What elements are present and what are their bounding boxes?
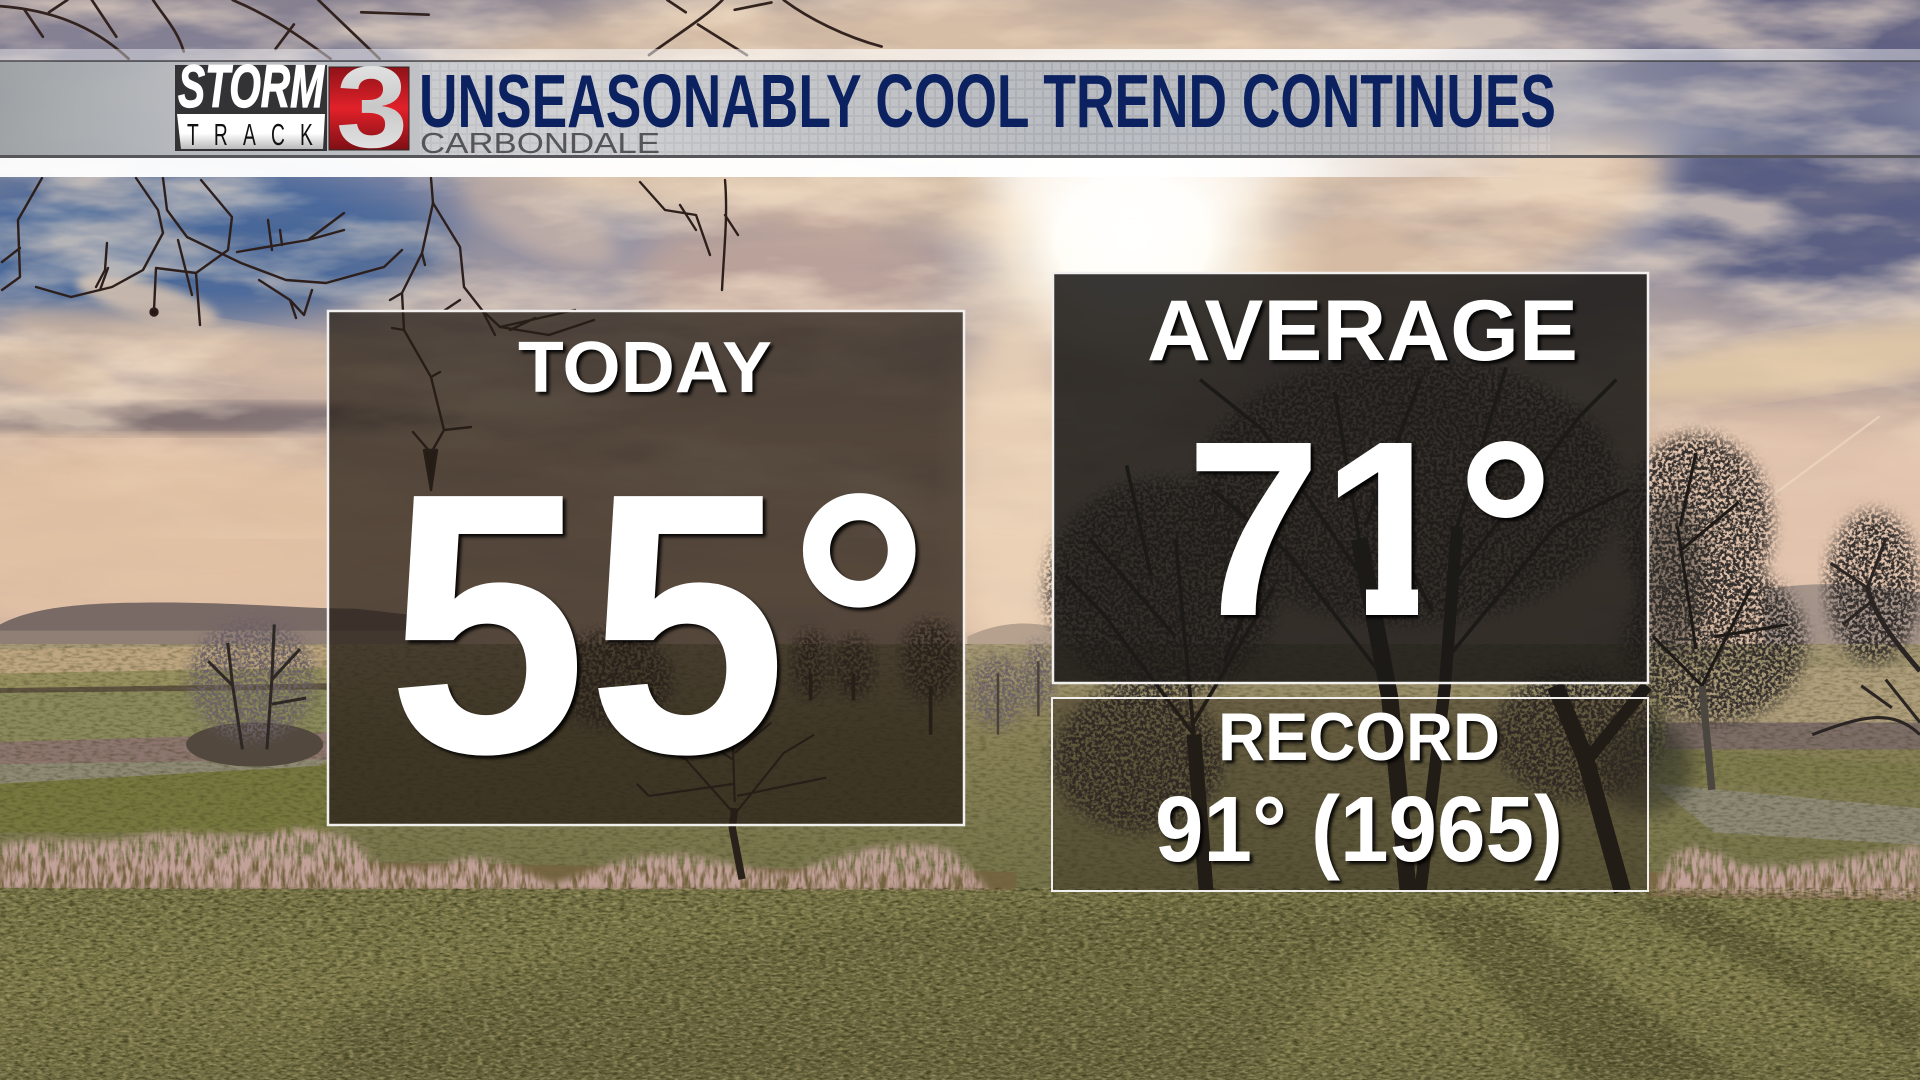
record temperature and year: 91° (1965) (1155, 777, 1563, 881)
panel: today (328, 311, 964, 831)
foreground tree in today panel (637, 722, 827, 879)
logo: Storm Track 3: TRACK (187, 119, 313, 152)
average temperature: 71° (1186, 389, 1554, 668)
distant hills (0, 584, 1920, 667)
logo: Storm Track 3 (175, 42, 409, 172)
small centre trees (969, 642, 1056, 735)
record heading: RECORD (1218, 699, 1500, 775)
foreground meadow (0, 888, 1920, 1080)
panel: average (1053, 273, 1648, 683)
location label: CARBONDALE (420, 128, 660, 160)
frosted grass strip (0, 829, 1920, 904)
panel: record (1052, 698, 1648, 891)
branches at top edge (0, 0, 882, 59)
logo: Storm Track 3: STORM (178, 53, 325, 120)
average heading: AVERAGE (1147, 283, 1578, 379)
large tree group behind average and record panels (1047, 355, 1806, 891)
today heading: TODAY (518, 328, 772, 408)
left field tree (186, 618, 323, 767)
today temperature: 55° (387, 415, 931, 831)
logo: Storm Track 3: 3 (336, 42, 408, 172)
sky (0, 0, 1920, 661)
banner glass strip (0, 49, 1920, 177)
tree line inside today panel (551, 620, 960, 735)
mid-distance fields (0, 644, 1920, 907)
header banner (0, 42, 1920, 177)
hanging branches upper left (2, 178, 738, 490)
right edge tree (1812, 512, 1920, 735)
